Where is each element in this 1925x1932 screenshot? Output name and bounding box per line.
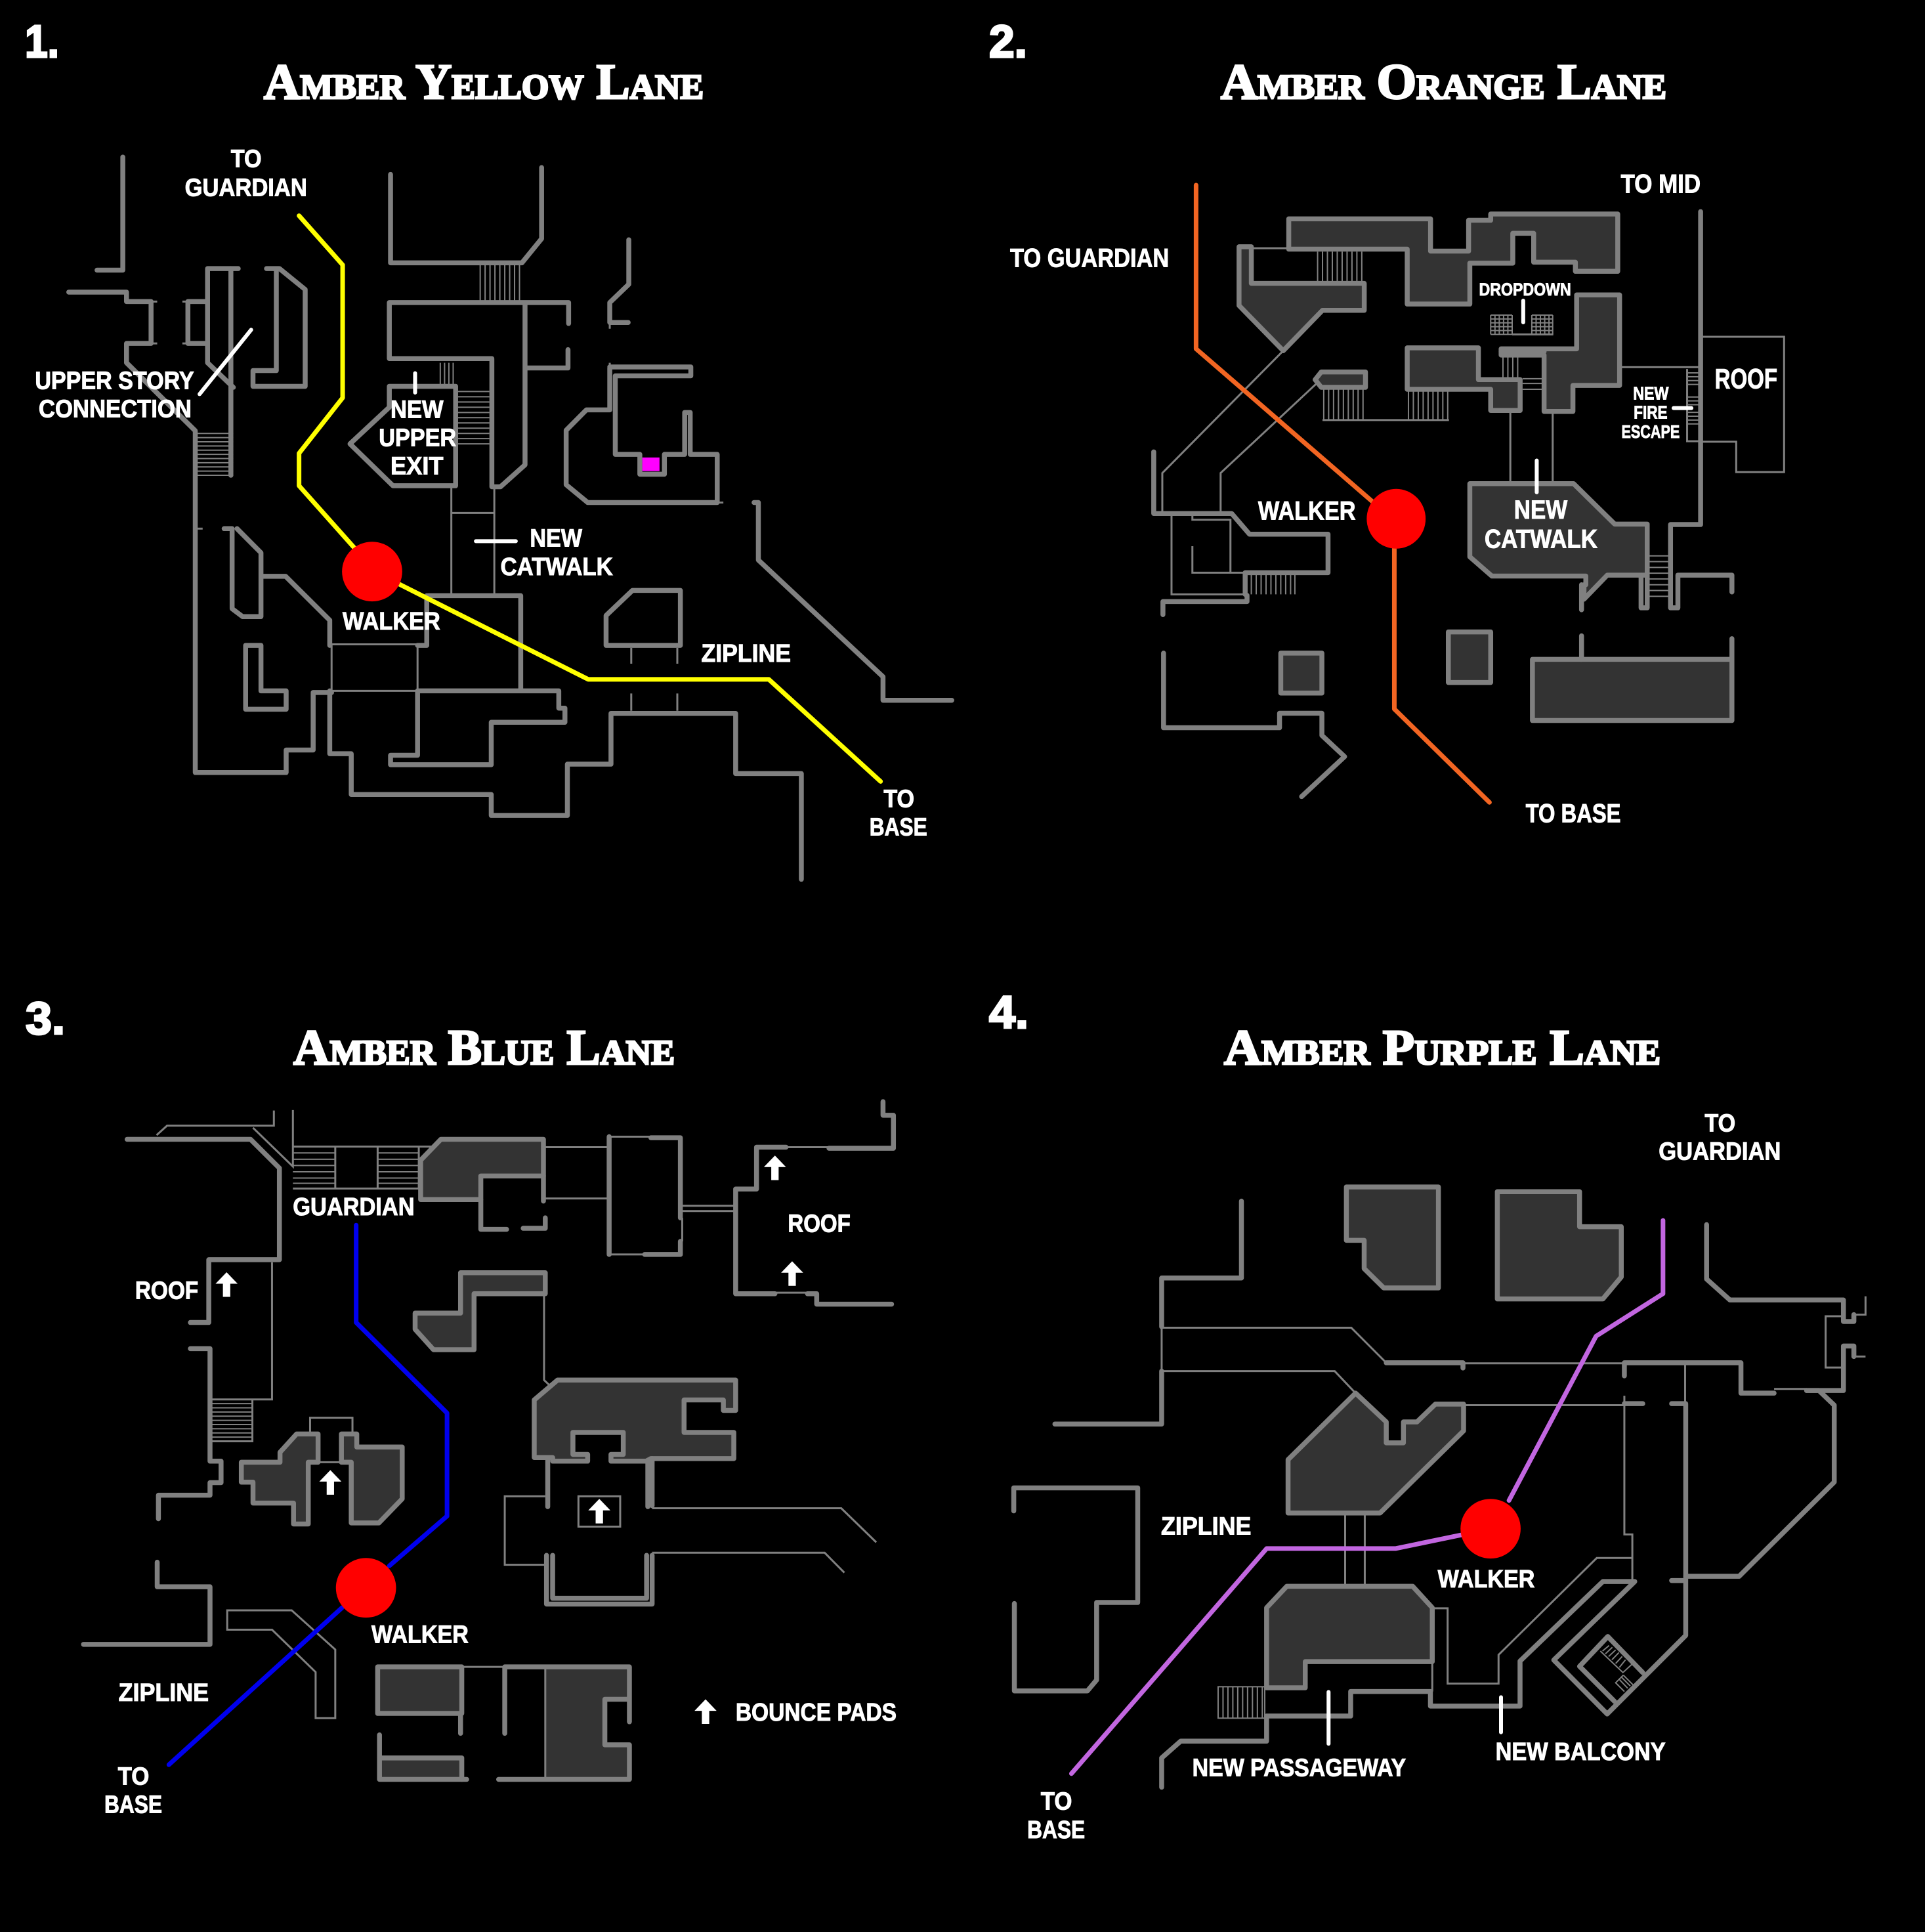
walker marker	[336, 1558, 396, 1618]
labels	[1027, 1109, 1781, 1843]
labels: TO	[118, 1762, 149, 1790]
number 4: 4.	[989, 987, 1028, 1038]
lane route: blue	[169, 1225, 447, 1765]
shaded buildings	[1267, 1187, 1621, 1688]
labels: BOUNCE PADS	[736, 1698, 897, 1726]
labels: NEW	[391, 395, 444, 423]
title: Amber Orange Lane: Amber Orange Lane	[1221, 54, 1666, 110]
labels: NEW	[530, 524, 582, 552]
stairs	[1246, 251, 1699, 596]
labels: EXIT	[391, 452, 444, 480]
labels: TO GUARDIAN	[1010, 244, 1169, 272]
labels: ROOF	[788, 1209, 851, 1237]
objective: magenta marker	[643, 458, 660, 471]
shaded buildings	[1239, 214, 1732, 721]
map walls	[83, 1102, 893, 1779]
shaded buildings	[242, 1140, 736, 1779]
labels: GUARDIAN	[293, 1192, 415, 1220]
callout lines	[1328, 1692, 1501, 1744]
labels: WALKER	[371, 1620, 469, 1648]
lane route: orange	[1196, 185, 1489, 802]
number 3: 3.	[26, 993, 65, 1044]
balcony stairs	[1600, 1646, 1633, 1692]
labels: DROPDOWN	[1479, 280, 1571, 299]
number 1: 1.	[25, 16, 59, 67]
title: Amber Yellow Lane: Amber Yellow Lane	[264, 54, 704, 110]
labels: NEW BALCONY	[1496, 1737, 1666, 1765]
labels	[1010, 169, 1777, 828]
labels: TO	[883, 784, 914, 813]
labels: CATWALK	[501, 552, 613, 581]
labels: ESCAPE	[1621, 421, 1680, 442]
labels: CATWALK	[1485, 524, 1597, 553]
labels: CONNECTION	[39, 395, 192, 423]
lane route: purple	[1071, 1220, 1663, 1774]
labels: NEW	[1514, 495, 1567, 525]
labels: TO MID	[1621, 169, 1701, 198]
callout lines	[1523, 301, 1691, 492]
labels: WALKER	[343, 607, 440, 635]
walker marker	[342, 542, 402, 601]
labels: TO	[1041, 1787, 1072, 1815]
panel: Amber Purple Lane map	[1014, 1109, 1865, 1843]
labels: GUARDIAN	[185, 173, 307, 202]
labels	[104, 1192, 897, 1818]
stairs	[196, 263, 520, 475]
panel: Amber Blue Lane map	[83, 1102, 897, 1818]
labels: ZIPLINE	[701, 639, 791, 667]
title: Amber Purple Lane: Amber Purple Lane	[1224, 1020, 1661, 1075]
callout lines	[200, 330, 516, 541]
stairs	[1218, 1686, 1265, 1718]
labels: TO	[1704, 1109, 1735, 1137]
labels: ZIPLINE	[1161, 1512, 1251, 1540]
labels: TO	[231, 144, 262, 173]
labels: BASE	[870, 813, 927, 841]
labels: ROOF	[135, 1276, 198, 1304]
labels: BASE	[1027, 1815, 1085, 1843]
panel: Amber Orange Lane map	[1010, 169, 1784, 828]
labels: WALKER	[1438, 1564, 1534, 1593]
labels: NEW	[1633, 383, 1669, 403]
labels: UPPER STORY	[35, 366, 194, 395]
number 2: 2.	[989, 16, 1027, 67]
walker marker	[1460, 1499, 1521, 1558]
dropdown grids	[1491, 315, 1553, 334]
walker marker	[1366, 489, 1426, 549]
title: Amber Blue Lane: Amber Blue Lane	[293, 1020, 675, 1075]
panel: Amber Yellow Lane map	[35, 144, 952, 879]
map walls	[1154, 211, 1784, 796]
labels: FIRE	[1634, 402, 1668, 423]
labels: ZIPLINE	[119, 1678, 209, 1706]
labels	[35, 144, 927, 841]
map walls	[1014, 1201, 1865, 1787]
labels: UPPER	[379, 423, 456, 452]
labels: TO BASE	[1526, 799, 1621, 828]
labels: ROOF	[1715, 364, 1777, 395]
labels: NEW PASSAGEWAY	[1193, 1753, 1406, 1782]
labels: GUARDIAN	[1659, 1137, 1781, 1165]
map walls	[69, 157, 952, 879]
labels: BASE	[104, 1790, 162, 1818]
icons: bounce pad arrows	[215, 1155, 803, 1724]
stairs	[212, 1153, 419, 1437]
labels: WALKER	[1258, 496, 1356, 525]
lane route: yellow	[299, 216, 881, 781]
